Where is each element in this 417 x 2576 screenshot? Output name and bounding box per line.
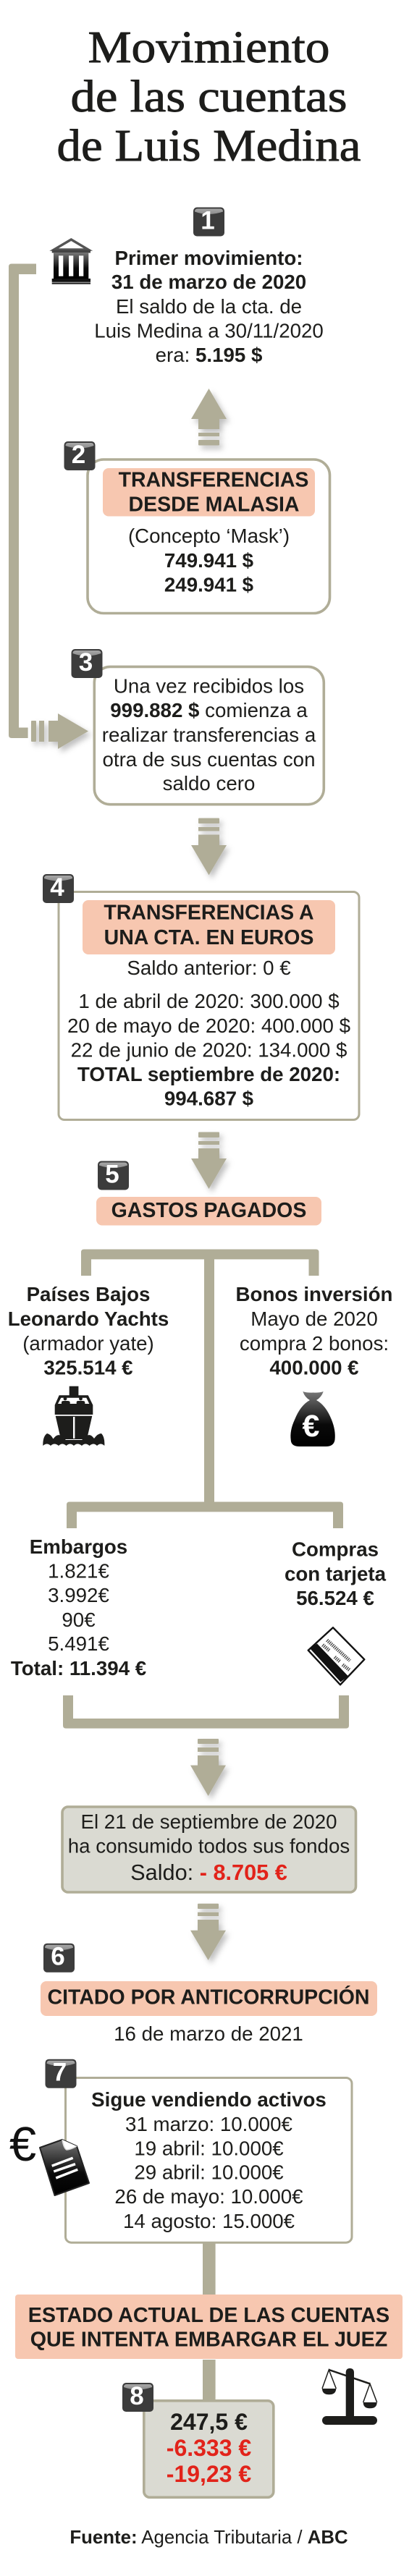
badge 4: 4 — [50, 873, 64, 902]
arrow: to step 5 — [191, 1132, 227, 1189]
panel: step 8 balances — [144, 2401, 274, 2497]
text: Bonos inversion — [236, 1283, 392, 1379]
arrow: to step 6 — [190, 1904, 226, 1960]
badge 6 — [43, 1943, 75, 1973]
badge 5: 5 — [105, 1161, 119, 1188]
panel: step 7 selling assets: Sigue vendiendo activos — [91, 2088, 327, 2111]
icon: euro symbol: € — [9, 2117, 36, 2172]
heading: estado actual — [15, 2295, 403, 2359]
panel: balance September 2020: ha consumido todos sus fondos — [68, 1835, 350, 1857]
panel: step 4 transfers to euro account: Saldo anterior: 0 € — [127, 957, 291, 979]
icon: document — [40, 2140, 89, 2195]
arrow: to step 4 — [191, 818, 227, 875]
text: Compras con tarjeta — [285, 1538, 387, 1609]
badge 3 — [71, 648, 103, 678]
panel: step 7 selling assets: 31 marzo: 10.000€ — [125, 2113, 292, 2135]
badge 1 — [193, 207, 224, 236]
text: Paises Bajos: 325.514 € — [43, 1357, 133, 1379]
text: first movement — [94, 247, 324, 366]
panel: step 2 transfers from Malaysia: DESDE MALASIA — [129, 493, 299, 517]
panel: step 8 balances: 247,5 € — [170, 2409, 248, 2435]
connector: estado actual to box 8 — [203, 2360, 216, 2402]
panel: step 3 — [94, 666, 324, 805]
title: de las cuentas — [71, 72, 348, 122]
text: Paises Bajos: (armador yate) — [22, 1332, 154, 1355]
panel: step 7 selling assets: 26 de mayo: 10.000€ — [114, 2185, 303, 2208]
text: date: 16 de marzo de 2021 — [114, 2022, 303, 2045]
panel: balance September 2020: El 21 de septiembre de 2020 — [80, 1810, 337, 1833]
left connector line from first movement to step 3 — [9, 263, 36, 738]
text: Embargos: Embargos — [30, 1535, 127, 1558]
bracket: bottom connector — [63, 1695, 349, 1729]
text: Paises Bajos: Países Bajos — [27, 1283, 150, 1305]
panel: step 4 transfers to euro account: TOTAL septiembre de 2020: — [77, 1063, 340, 1085]
heading: gastos pagados: GASTOS PAGADOS — [111, 1199, 306, 1222]
text: Embargos: 5.491€ — [48, 1632, 109, 1655]
text: Paises Bajos — [8, 1283, 169, 1379]
badge 3: 3 — [79, 648, 93, 677]
panel: step 4 transfers to euro account: 20 de mayo de 2020: 400.000 $ — [67, 1014, 350, 1037]
panel: step 2 transfers from Malaysia: 749.941 $ — [164, 549, 253, 572]
panel: balance September 2020: Saldo: - 8.705 € — [130, 1860, 287, 1885]
panel: step 2 transfers from Malaysia: 249.941 $ — [164, 573, 253, 596]
heading: citado por anticorrupcion — [41, 1981, 377, 2016]
arrow: into step 3 — [31, 713, 88, 749]
badge 6: 6 — [51, 1943, 65, 1971]
arrow: to balance box — [190, 1739, 226, 1796]
badge 7 — [45, 2059, 77, 2088]
icon: money bag: € — [303, 1409, 320, 1444]
heading: estado actual: ESTADO ACTUAL DE LAS CUENTAS — [28, 2304, 389, 2327]
text: Compras con tarjeta: Compras — [292, 1538, 379, 1561]
icon: credit card — [308, 1627, 364, 1685]
icon: bank — [52, 240, 90, 284]
text: Bonos inversion: Mayo de 2020 — [250, 1308, 378, 1330]
title: de Luis Medina — [56, 122, 361, 171]
panel: step 4 transfers to euro account: 1 de abril de 2020: 300.000 $ — [78, 990, 340, 1012]
text: first movement: Luis Medina a 30/11/2020 — [94, 320, 324, 342]
panel: step 4 transfers to euro account: TRANSFERENCIAS A — [104, 902, 314, 925]
text: Compras con tarjeta: 56.524 € — [296, 1587, 374, 1609]
text: first movement: Primer movimiento: — [114, 247, 303, 269]
icon: scales of justice — [322, 2368, 377, 2425]
badge 7: 7 — [53, 2059, 67, 2087]
text: Embargos: Total: 11.394 € — [11, 1657, 146, 1679]
text: Bonos inversion: 400.000 € — [269, 1357, 359, 1379]
panel: step 3: Una vez recibidos los — [114, 674, 304, 698]
badge 5 — [98, 1161, 129, 1190]
panel: step 2 transfers from Malaysia: (Concepto ‘Mask’) — [128, 525, 290, 547]
badge 8: 8 — [130, 2382, 144, 2410]
icon: money bag — [290, 1391, 335, 1446]
source: Fuente: Agencia Tributaria / ABC — [70, 2528, 348, 2548]
panel: step 4 transfers to euro account: 22 de junio de 2020: 134.000 $ — [71, 1038, 347, 1061]
text: Paises Bajos: Leonardo Yachts — [8, 1308, 169, 1330]
panel: step 2 transfers from Malaysia: TRANSFERENCIAS — [119, 469, 308, 492]
panel: step 7 selling assets: 29 abril: 10.000€ — [134, 2161, 284, 2184]
text: Compras con tarjeta: con tarjeta — [285, 1563, 387, 1585]
text: first movement: era: 5.195 $ — [156, 344, 262, 366]
text: Embargos: 3.992€ — [48, 1584, 109, 1606]
panel: step 4 transfers to euro account: UNA CTA. EN EUROS — [104, 926, 313, 949]
connector: box 7 to estado actual — [203, 2242, 216, 2297]
panel: step 4 transfers to euro account — [59, 891, 359, 1120]
panel: step 3: otra de sus cuentas con — [103, 748, 315, 771]
badge 1: 1 — [201, 207, 215, 234]
panel: step 2 transfers from Malaysia — [88, 459, 330, 614]
panel: step 3: realizar transferencias a — [102, 724, 316, 746]
title: Movimiento — [88, 23, 330, 72]
text: first movement: 31 de marzo de 2020 — [111, 271, 306, 293]
heading: citado por anticorrupcion: CITADO POR ANTICORRUPCIÓN — [48, 1986, 369, 2009]
text: Bonos inversion: Bonos inversión — [236, 1283, 392, 1305]
text: Embargos: 1.821€ — [48, 1559, 109, 1582]
panel: step 7 selling assets: 19 abril: 10.000€ — [134, 2137, 284, 2159]
panel: step 8 balances: -6.333 € — [167, 2435, 251, 2461]
text: Bonos inversion: compra 2 bonos: — [240, 1332, 389, 1355]
badge 2 — [64, 441, 96, 470]
panel: step 3: 999.882 $ comienza a — [110, 699, 308, 721]
panel: step 7 selling assets — [65, 2078, 352, 2242]
panel: step 3: saldo cero — [163, 772, 255, 795]
panel: step 8 balances: -19,23 € — [167, 2461, 251, 2487]
title — [56, 23, 361, 171]
panel: step 4 transfers to euro account: 994.687 $ — [164, 1088, 253, 1110]
panel: balance September 2020 — [62, 1807, 356, 1892]
text: first movement: El saldo de la cta. de — [116, 295, 302, 318]
tree connector — [67, 1249, 343, 1528]
badge 8 — [122, 2382, 153, 2412]
heading: estado actual: QUE INTENTA EMBARGAR EL JUEZ — [30, 2329, 387, 2352]
text: Embargos: 90€ — [62, 1609, 96, 1631]
badge 4 — [43, 873, 74, 903]
text: Embargos — [11, 1535, 146, 1679]
panel: step 7 selling assets: 14 agosto: 15.000€ — [123, 2210, 295, 2232]
arrow: up to step 1 — [191, 389, 227, 446]
badge 2: 2 — [72, 441, 85, 469]
icon: ship — [43, 1386, 104, 1446]
